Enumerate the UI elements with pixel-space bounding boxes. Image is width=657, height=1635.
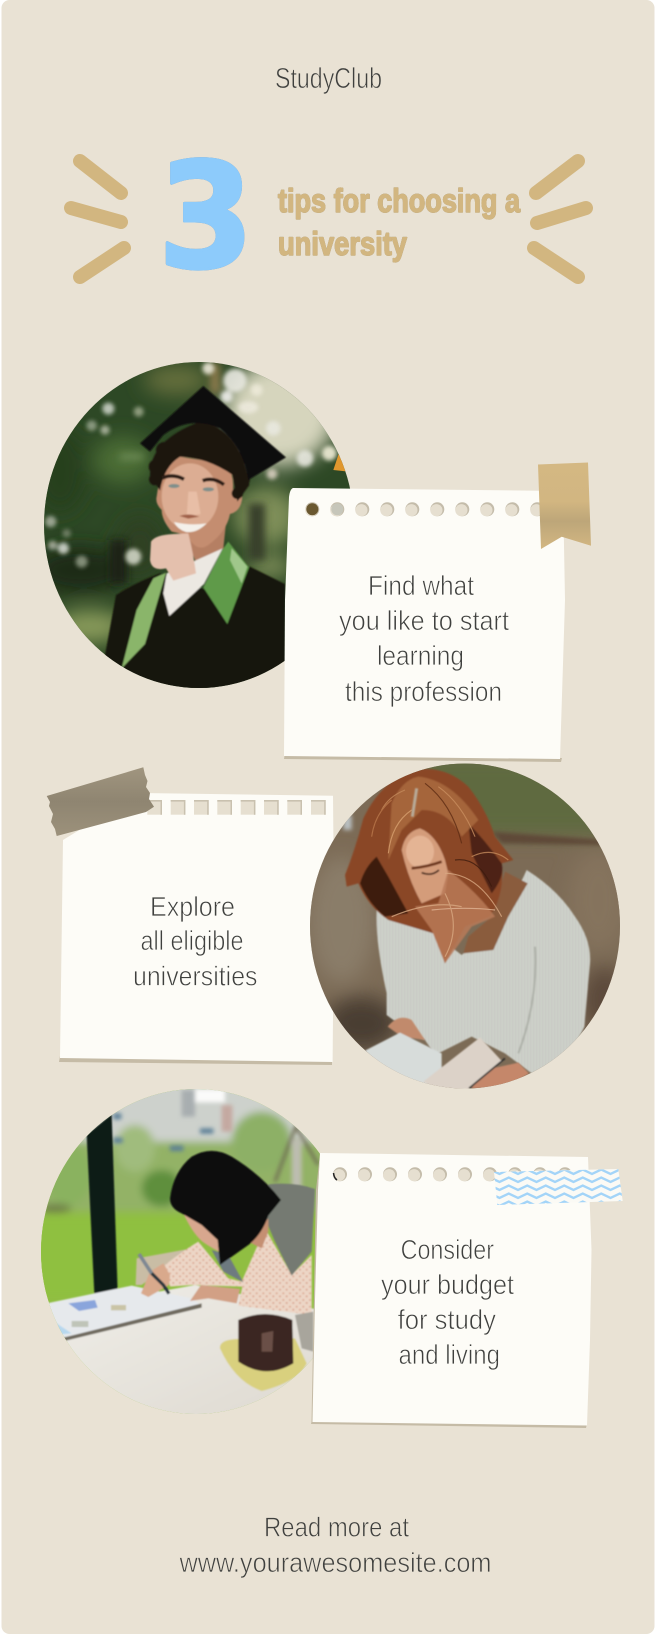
square perforations [147,800,326,815]
note shadow [284,752,562,762]
tip 1 text: learning [377,640,464,671]
masking tape [47,767,154,836]
tip 3 text [381,1234,514,1370]
note paper [284,488,565,759]
note paper [60,793,334,1062]
footer call to action [179,1511,492,1578]
panel: tip 3 note [311,1153,623,1428]
photo: woman studying [41,1089,320,1414]
tip 3 text: your budget [381,1269,514,1300]
big number 3: 3 [158,132,254,302]
title: university [278,225,408,262]
tip 1 text [339,570,509,707]
icon: right rays [534,161,586,277]
tip 2 text: all eligible [140,925,244,956]
note paper [312,1153,592,1426]
note shadow [311,1419,587,1428]
tip 1 text: this profession [345,676,502,707]
binding holes [305,502,544,516]
panel: tip 1 note [284,462,591,762]
tip 1 text: Find what [368,570,474,601]
photo: woman reading [310,764,620,1088]
ribbon tab [538,462,591,549]
note shadow [59,1056,332,1065]
icon: left rays [71,161,124,277]
tip 3 text: Consider [401,1234,494,1265]
footer call to action: Read more at [264,1511,409,1542]
title: tips for choosing a [278,182,521,219]
panel: tip 2 note [47,767,334,1065]
title [278,182,521,262]
zigzag tape [494,1169,623,1205]
tip 1 text: you like to start [339,605,509,636]
note edge shadow [312,1153,320,1422]
tip 3 text: and living [398,1339,500,1370]
tip 2 text [133,891,258,992]
tip 2 text: Explore [150,891,235,922]
tip 3 text: for study [398,1304,496,1335]
footer call to action: www.yourawesomesite.com [179,1547,492,1578]
binding holes [333,1167,572,1181]
tip 2 text: universities [133,961,258,992]
photo: graduate [33,357,353,693]
brand name: StudyClub [275,63,382,95]
